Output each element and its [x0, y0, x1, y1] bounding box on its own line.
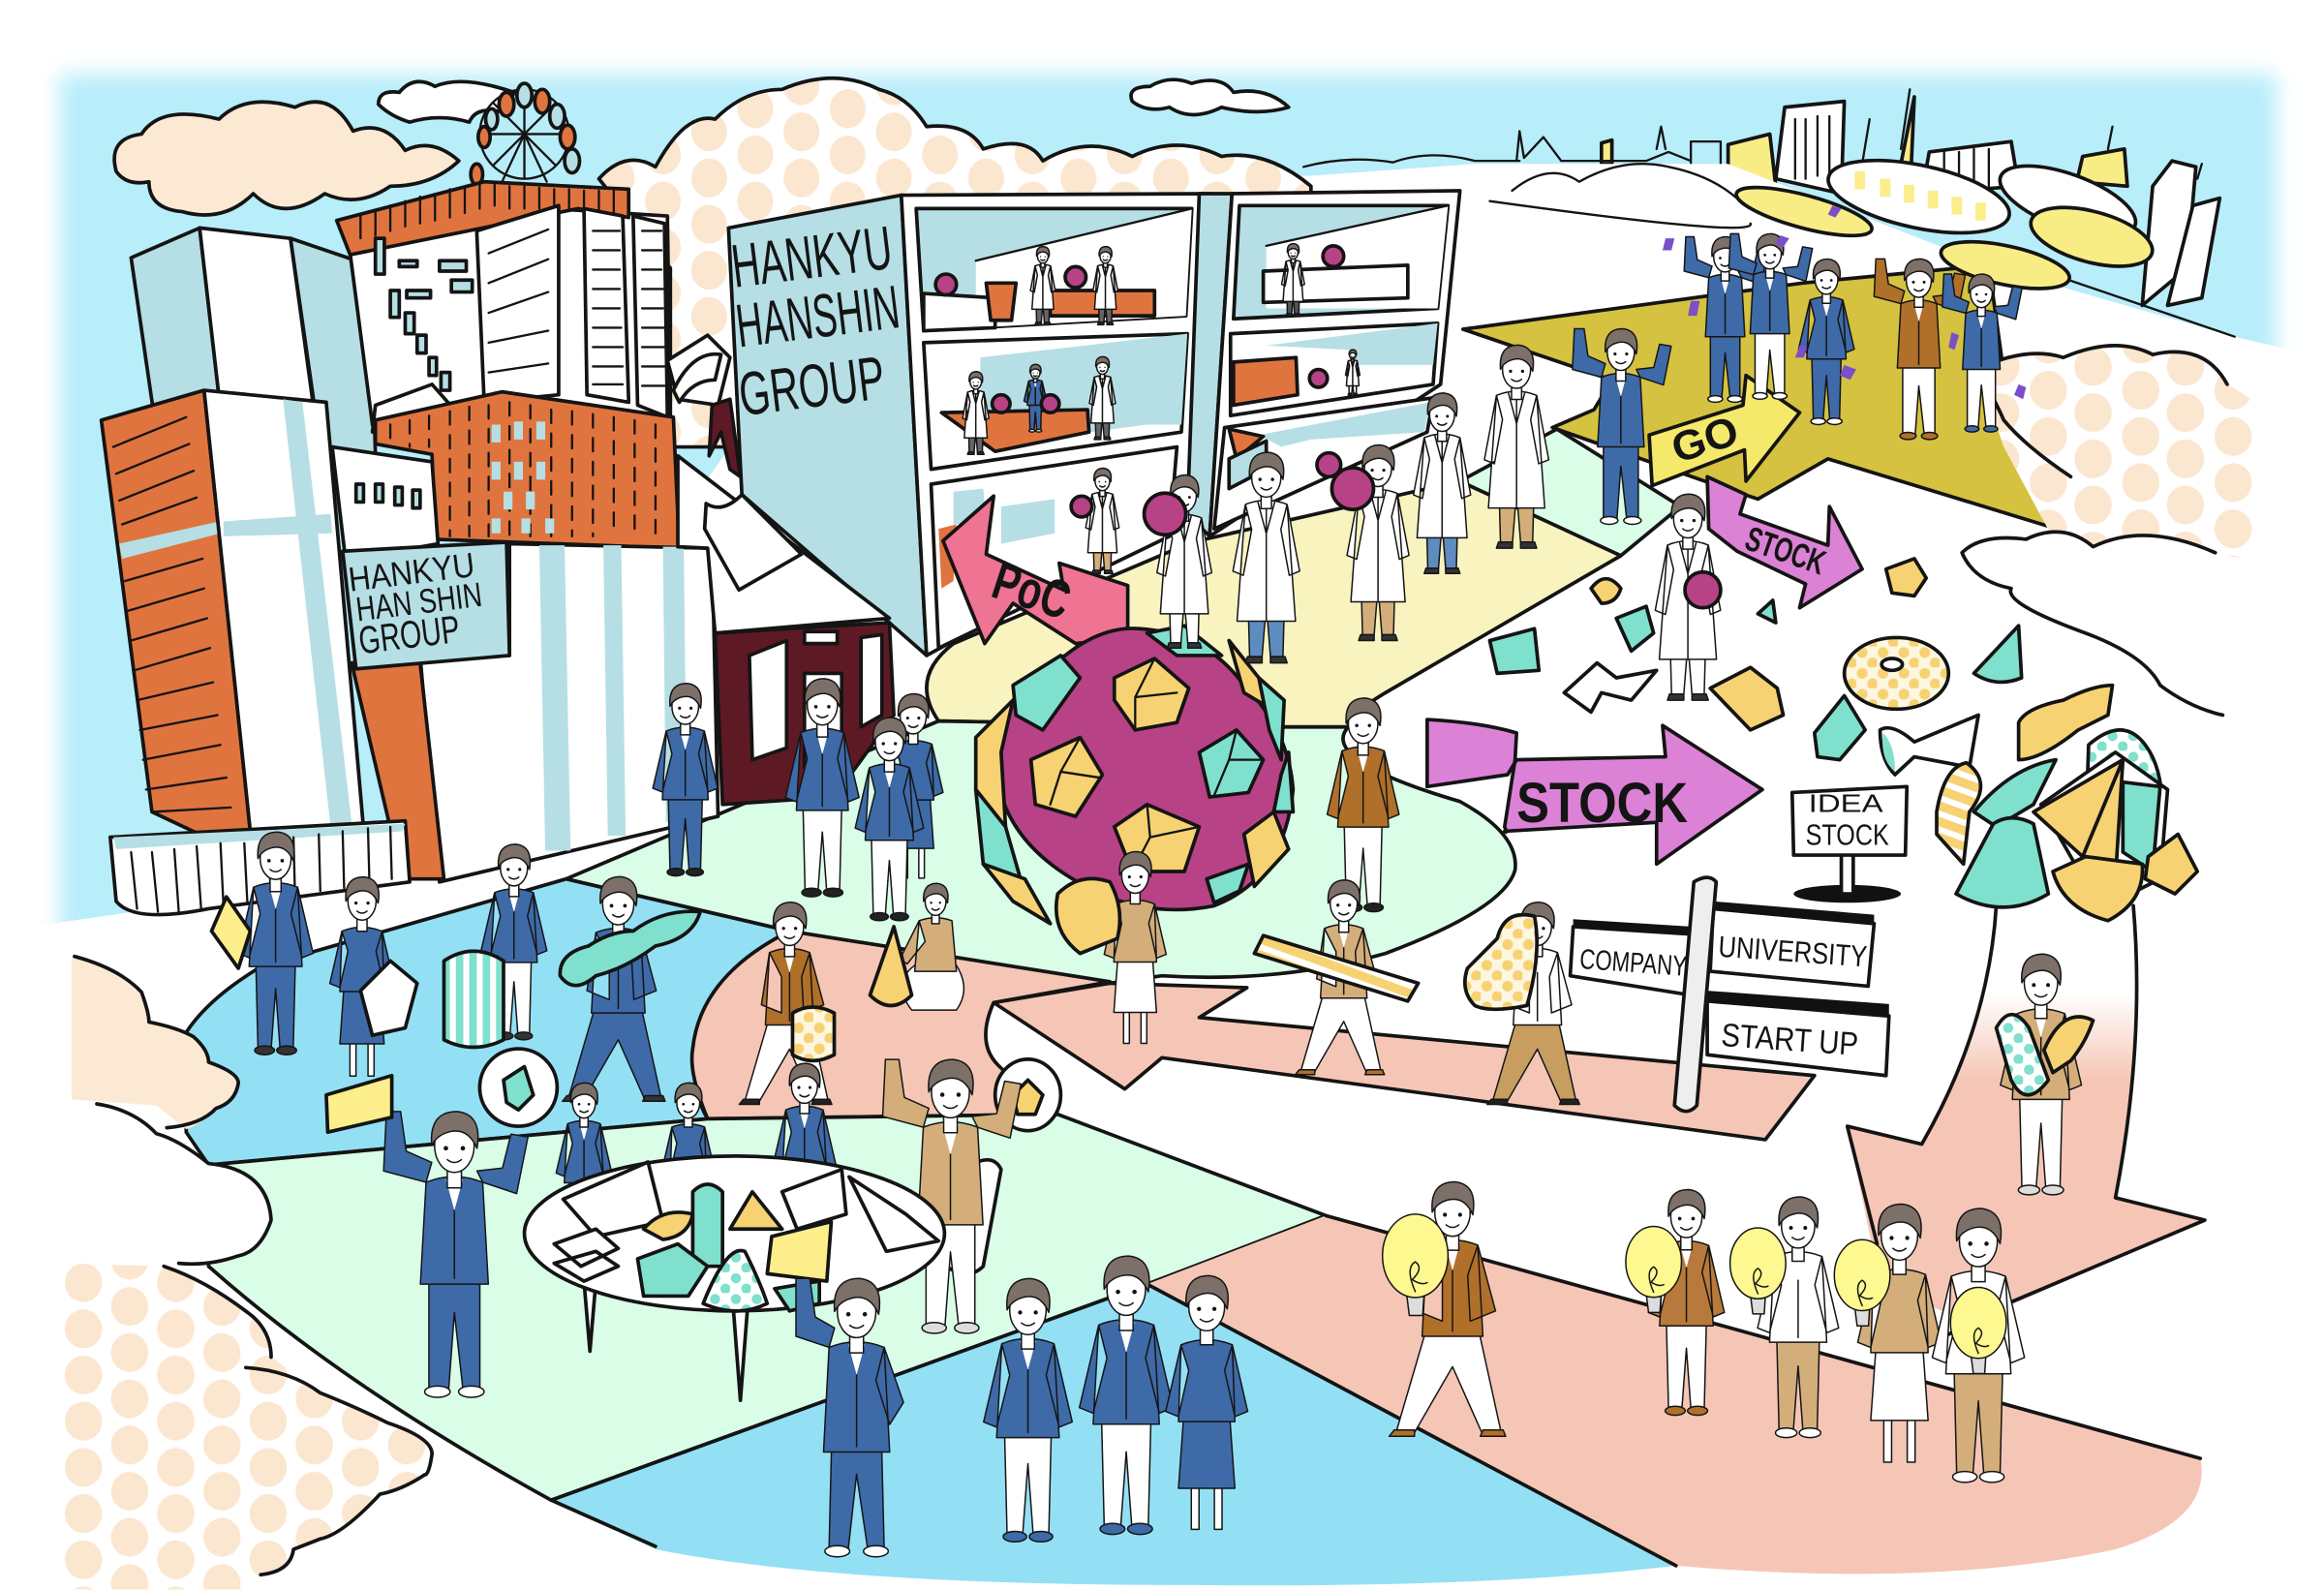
- sphere of ideas: [976, 626, 1293, 924]
- cloud: small white left: [379, 81, 514, 122]
- sign: small Hankyu Hanshin: HANKYU: [347, 546, 476, 599]
- zone: mint centre: [566, 721, 1515, 983]
- train: rear car: [667, 335, 741, 476]
- thought bubbles: [479, 1049, 1060, 1131]
- room a: [1234, 205, 1448, 319]
- ferris wheel: [471, 83, 579, 185]
- room 1: [916, 208, 1192, 331]
- zone: blue bottom: [551, 1284, 1676, 1585]
- cloud: cream left: [114, 102, 459, 215]
- right wing: [1209, 191, 1460, 536]
- arrow edges: [1848, 905, 2205, 1348]
- arrow: PoC banner: [943, 496, 1128, 644]
- arrow: STOCK small: [1707, 476, 1862, 608]
- room 2: [924, 334, 1187, 470]
- people: table group: [556, 1059, 1021, 1333]
- headline text: HANKYU: [728, 214, 896, 301]
- cloud: small white right: [1131, 79, 1289, 114]
- zone: mint lower: [208, 1115, 1326, 1500]
- flag: small yellow: [211, 897, 250, 968]
- arrow: GO: [1649, 376, 1799, 486]
- building: blue tower: [131, 228, 376, 454]
- building base ledge: [110, 821, 410, 915]
- train: [678, 456, 894, 805]
- striped cylinder: [443, 951, 504, 1048]
- arrow: pink curved arrow to the bands: [1848, 905, 2205, 1341]
- signpost: company, university, start up: COMPANY: [1578, 944, 1688, 983]
- small gears in rooms: [935, 246, 1344, 517]
- idea objects: scattered shapes: [1489, 559, 2113, 775]
- building: main Hankyu Hanshin: GROUP: [735, 344, 889, 429]
- cloud: large dotted behind buildings: [598, 78, 1311, 447]
- signpost: company, university, start up: [1571, 877, 1889, 1112]
- arrow: STOCK big: STOCK: [1516, 772, 1688, 835]
- facets: [976, 626, 1293, 924]
- polyhedron held: [360, 961, 417, 1035]
- cloud: lower left white: [72, 1103, 271, 1264]
- round table: [525, 1156, 944, 1400]
- room c: [1214, 398, 1433, 529]
- people: pink zone pair: [739, 883, 963, 1104]
- cloud: lower left dotted: [63, 1264, 432, 1590]
- people: lab staff on yellow path: [1145, 345, 1721, 700]
- horizon roof line: [1303, 155, 2235, 337]
- building: orange tall: [102, 390, 363, 860]
- UFOs: [1732, 147, 2158, 297]
- sign: small Hankyu Hanshin: [343, 542, 509, 669]
- ground zones: [186, 265, 2205, 1585]
- arrow: STOCK big: [1427, 719, 1762, 864]
- arrow: GO: GO: [1667, 408, 1744, 473]
- cloud shape carried: [560, 911, 700, 986]
- arrow: PoC banner: PoC: [986, 550, 1078, 631]
- arrow: pink left arrow: [994, 983, 1815, 1140]
- sign: idea stock: [1792, 786, 1907, 902]
- teal column: [1187, 194, 1232, 536]
- signpost: company, university, start up: UNIVERSITY: [1717, 930, 1868, 973]
- sign: small Hankyu Hanshin: GROUP: [356, 608, 462, 662]
- building: orange brick: [373, 384, 680, 548]
- cloud: right white: [1962, 532, 2249, 722]
- room 3: [932, 447, 1177, 648]
- zone: yellow path: [927, 481, 1621, 727]
- city towers: [1602, 89, 2219, 305]
- band edge lines: [551, 1215, 2200, 1566]
- building: main Hankyu Hanshin: [728, 191, 1460, 656]
- zone: gold star: [1463, 265, 2081, 536]
- people: arrow walker: [1997, 954, 2094, 1195]
- cloud: lower left cream: [72, 957, 238, 1129]
- arrow: STOCK small: STOCK: [1740, 520, 1830, 582]
- people: Go team celebrating: [1573, 233, 2022, 525]
- small figures in rooms: [963, 244, 1360, 573]
- people: blue zone group: [211, 832, 700, 1101]
- building: main Hankyu Hanshin: HANSHIN: [732, 273, 903, 360]
- sky background: [60, 75, 2277, 968]
- building: small white block: [332, 447, 438, 560]
- zone: mint strip: [1460, 429, 1680, 556]
- zone: blue left: [186, 879, 789, 1165]
- confetti: [1663, 205, 2026, 399]
- zone: pink centre: [692, 932, 1110, 1118]
- people: bottom group: [796, 1256, 1247, 1557]
- people: bulb carriers: [1383, 1181, 2025, 1483]
- zone: pink bottom band: [1147, 1215, 2202, 1574]
- far skyline and bridge: [1516, 127, 1721, 171]
- person with flag: [326, 1076, 528, 1397]
- sign: idea stock: IDEA: [1809, 788, 1883, 817]
- people: group in front of the train: [653, 679, 943, 921]
- signpost: company, university, start up: START UP: [1720, 1017, 1859, 1063]
- building: red-top tower with ferris wheel: [337, 83, 670, 424]
- skyline: distant city: [1516, 89, 2219, 305]
- people: woman with gold cloud and centre group: [1056, 698, 1579, 1104]
- idea objects: pile: [1937, 730, 2197, 921]
- cloud: right dotted: [1977, 346, 2257, 559]
- room b: [1231, 323, 1438, 415]
- building: white wall and orange strip: [352, 544, 719, 882]
- sign: small Hankyu Hanshin: HAN SHIN: [353, 576, 484, 628]
- sign: idea stock: STOCK: [1806, 817, 1889, 851]
